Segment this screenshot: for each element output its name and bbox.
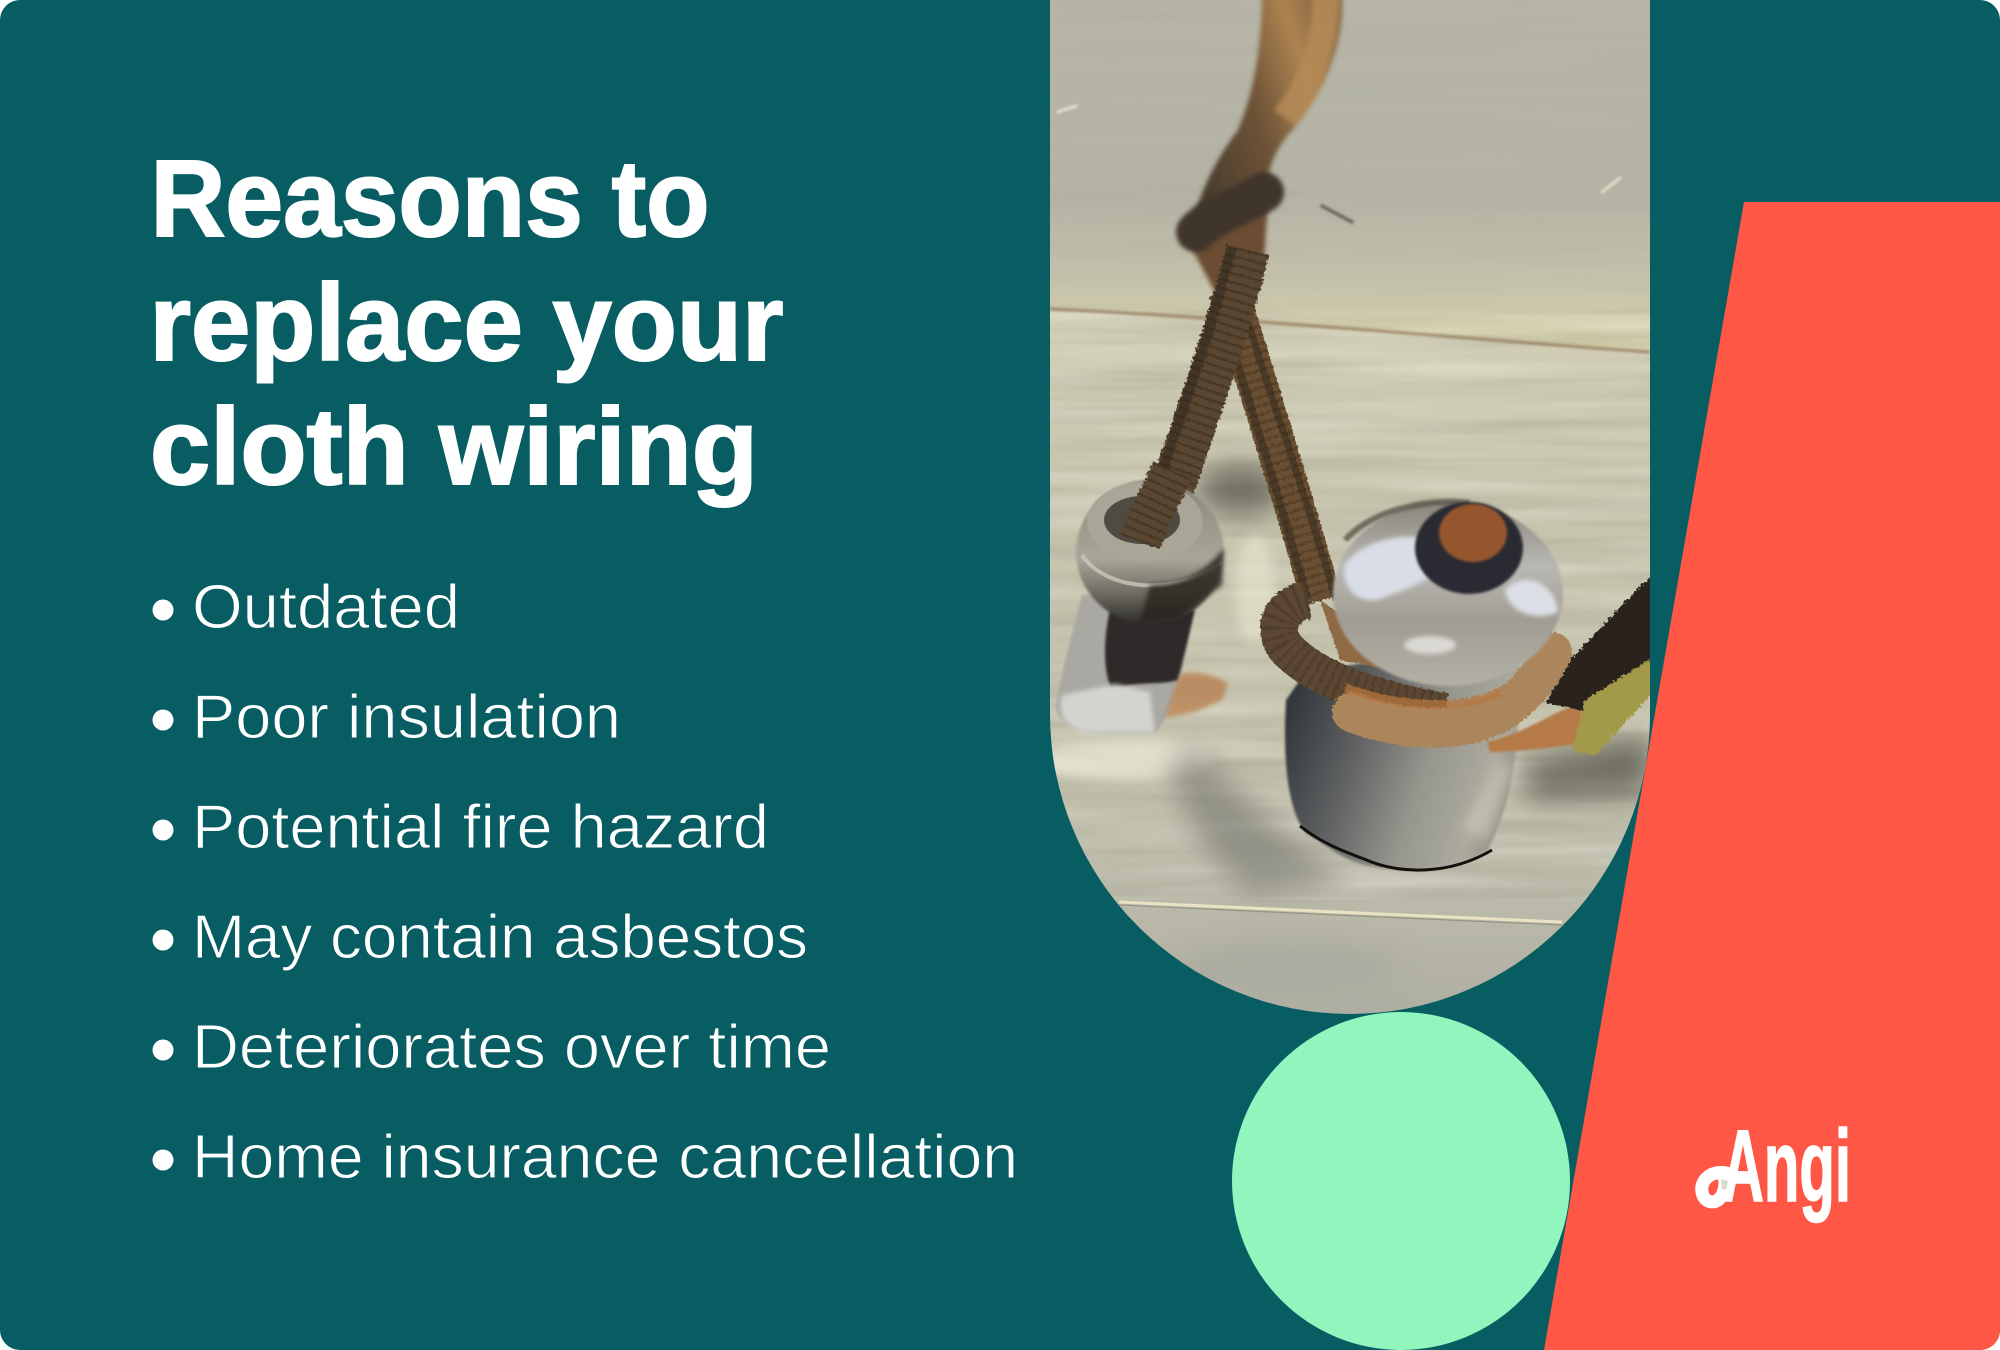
coral angled panel (1544, 202, 2000, 1350)
soft shading on boards (1030, 464, 1650, 987)
heading: cloth wiring (150, 386, 758, 508)
heading (150, 138, 784, 508)
bullet: Outdated: Outdated (192, 573, 460, 642)
wire: outgoing wire to the right (1487, 572, 1655, 756)
logo: Angi: Angi (1722, 1109, 1851, 1223)
left porcelain knob (1056, 470, 1228, 733)
heading: replace your (150, 262, 784, 384)
light crack line (1119, 902, 1562, 922)
wire: upper twisted section (1190, 0, 1342, 315)
bullet: Deteriorates over time (152, 1024, 828, 1068)
right porcelain insulator body (1285, 640, 1520, 871)
heading: Reasons to (150, 138, 710, 260)
bullet: Outdated (152, 584, 456, 628)
bullet list (152, 573, 1018, 1192)
board seam (1050, 309, 1650, 352)
nail head (1415, 502, 1523, 594)
bullet: Poor insulation (152, 694, 616, 738)
bullet: Potential fire hazard (152, 804, 764, 848)
right porcelain cap (1333, 502, 1563, 686)
wire: left strand to left knob (1142, 248, 1248, 535)
bullet: Home insurance cancellation (152, 1134, 1014, 1178)
mint circle (1232, 1012, 1570, 1350)
wire: orange strand under outgoing wire (1487, 702, 1586, 752)
bullet: Deteriorates over time: Deteriorates over time (192, 1013, 831, 1082)
photo: old cloth wiring on porcelain knobs (1030, 0, 1655, 1014)
bullet: May contain asbestos: May contain asbestos (192, 903, 808, 972)
bullet: Poor insulation: Poor insulation (192, 683, 621, 752)
small scratches (1058, 106, 1620, 222)
bullet: Potential fire hazard: Potential fire hazard (192, 793, 769, 862)
upper wood board (1050, 0, 1650, 360)
rust around left knob hole (1165, 672, 1228, 718)
bullet: Home insurance cancellation: Home insurance cancellation (192, 1123, 1018, 1192)
logo: Angi (1695, 1126, 1848, 1224)
lower wood board (1050, 310, 1650, 1014)
wire: dark twist over the crossing (1196, 192, 1264, 232)
wire: right strand to right knob (1216, 290, 1336, 600)
wire: loop around the right knob (1279, 600, 1552, 728)
wire end entering knob (1140, 470, 1172, 542)
